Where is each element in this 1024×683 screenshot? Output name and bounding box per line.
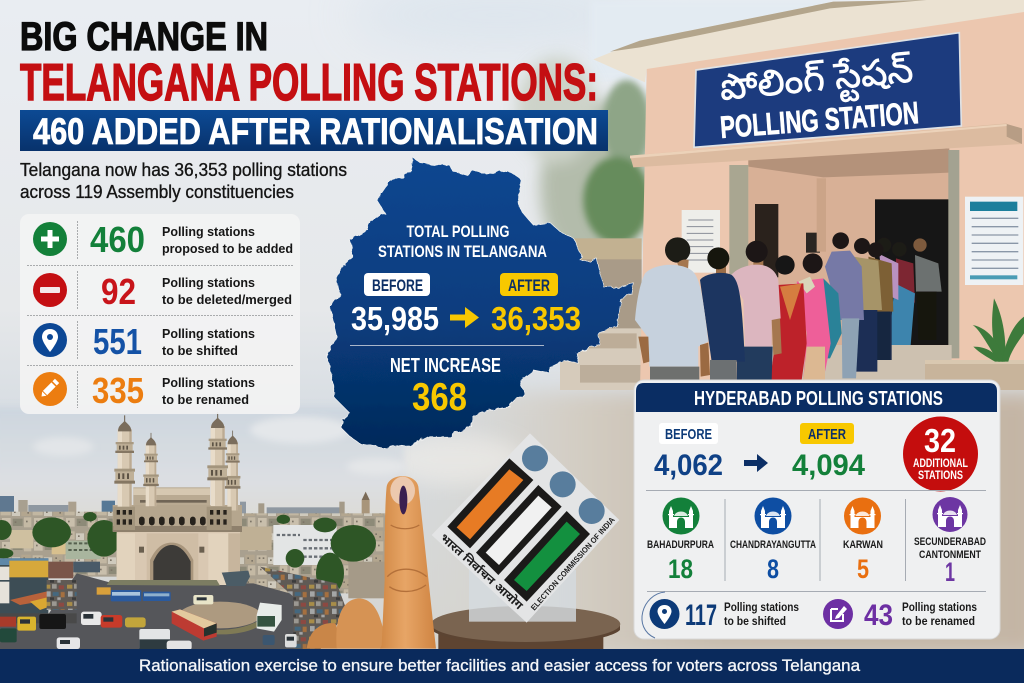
person 5: [797, 253, 831, 380]
sky behind building: [590, 0, 830, 80]
vehicles: [0, 587, 297, 650]
orange bar: [447, 458, 533, 548]
district: Secunderabad Cantonment: CANTONMENT: [919, 549, 981, 561]
row: added: Polling stations: [162, 224, 255, 239]
logo text: Hindi: भारत निर्वाचन आयोग: [437, 530, 527, 613]
title block: [20, 15, 608, 202]
stat: renamed: 43: [864, 599, 893, 632]
inked finger and hand: [307, 476, 436, 649]
title line 1: BIG CHANGE IN: [20, 15, 268, 59]
district: Karwan: KARWAN: [843, 539, 883, 551]
arrow: [744, 454, 768, 472]
person 10: [877, 238, 898, 360]
planter and plant: [925, 360, 1024, 390]
before figure: 35,985: [351, 300, 439, 337]
district: Chandrayangutta: CHANDRAYANGUTTA: [730, 539, 816, 551]
district: Secunderabad Cantonment: [914, 497, 986, 587]
crowded street on the right: [260, 567, 347, 650]
row: renamed: to be renamed: [162, 392, 249, 407]
row: added: proposed to be added: [162, 241, 293, 256]
sign: Telugu: పోలింగ్ స్టేషన్: [718, 49, 915, 114]
row: renamed: Polling stations: [162, 375, 255, 390]
row: deleted: 92: [101, 271, 136, 312]
arrow: [450, 307, 479, 328]
net increase: NET INCREASE: [390, 355, 501, 377]
sign board: [694, 33, 961, 147]
garden wall: [570, 238, 642, 260]
acrylic stand: [469, 570, 576, 622]
stat: shifted: [650, 599, 799, 632]
covered entrance: [748, 157, 949, 350]
roof: [593, 0, 1024, 82]
row: deleted: [33, 271, 292, 312]
stat: shifted: 117: [685, 599, 717, 632]
polling station sign text: [718, 49, 920, 145]
before figure: [351, 273, 439, 337]
city sky: [0, 407, 403, 517]
person 4: [770, 255, 807, 380]
Charminar: [107, 412, 242, 586]
logo text: English: ELECTION COMMISSION OF INDIA: [529, 515, 617, 612]
additional stations badge: [903, 416, 978, 492]
additional stations badge: ADDITIONAL: [913, 458, 968, 470]
stat: shifted: Polling stations: [724, 600, 799, 614]
district: Karwan: 5: [857, 554, 869, 584]
photo: polling station building with voters queueing: [517, 0, 1024, 390]
after figure: 36,353: [491, 300, 581, 337]
additional stations badge: STATIONS: [918, 470, 963, 482]
row: deleted: to be deleted/merged: [162, 292, 292, 307]
map heading: TOTAL POLLING: [406, 222, 510, 241]
trees: [517, 57, 653, 273]
sign: English: POLLING STATION: [719, 95, 920, 145]
white bar: [476, 485, 562, 575]
kiosk beside monument: [222, 571, 250, 586]
panel header: [636, 383, 997, 412]
before figure: BEFORE: [372, 276, 423, 295]
district: Chandrayangutta: [730, 498, 816, 584]
roundabout: [179, 602, 261, 628]
after: 4,094: [792, 449, 865, 482]
row: deleted: Polling stations: [162, 275, 255, 290]
person 9: [868, 242, 893, 360]
panel: Hyderabad polling stations: [634, 380, 1000, 639]
row: renamed: 335: [92, 370, 144, 411]
after: [792, 423, 865, 482]
map heading: [378, 222, 547, 261]
map heading: STATIONS IN TELANGANA: [378, 242, 547, 261]
doors: [875, 199, 949, 346]
person 12: [913, 238, 942, 340]
before: [654, 423, 723, 482]
person 3: [730, 241, 782, 380]
after figure: AFTER: [508, 276, 550, 295]
state outline: [327, 157, 633, 448]
footer banner: Rationalisation exercise to ensure better facilities and easier access for voters across Telangana: [139, 656, 861, 675]
district: Bahadurpura: [647, 498, 714, 584]
intro text: across 119 Assembly constituencies: [20, 182, 294, 202]
after figure: [491, 273, 581, 337]
city buildings: [0, 512, 387, 598]
person 7: [825, 232, 864, 378]
skyline: [0, 492, 370, 527]
pillars: [729, 165, 748, 280]
district: Bahadurpura: BAHADURPURA: [647, 539, 714, 551]
intro text: [20, 160, 347, 202]
district: Chandrayangutta: 8: [767, 554, 779, 584]
person 11: [888, 242, 915, 345]
additional stations badge: 32: [924, 422, 956, 459]
row: shifted: [33, 321, 255, 362]
person 2: [700, 247, 745, 380]
person 8: [853, 238, 882, 372]
logo buttons: [522, 445, 605, 524]
row: shifted: to be shifted: [162, 343, 238, 358]
net increase: [390, 355, 501, 419]
subtitle banner: 460 ADDED AFTER RATIONALISATION: [33, 111, 598, 152]
panel: key changes: [20, 214, 300, 414]
stat: renamed: [823, 599, 977, 632]
person 1: [635, 237, 710, 380]
green bar: [504, 511, 590, 602]
person 6: [823, 278, 842, 358]
stat: shifted: to be shifted: [724, 614, 786, 628]
district: Secunderabad Cantonment: 1: [945, 557, 955, 587]
district: Bahadurpura: 18: [668, 554, 693, 584]
logo plate: [432, 433, 619, 623]
district: Karwan: [843, 498, 883, 584]
row: added: 460: [90, 219, 145, 260]
stat: renamed: to be renamed: [902, 614, 975, 628]
stat: renamed: Polling stations: [902, 600, 977, 614]
net increase: 368: [412, 376, 467, 419]
before: 4,062: [654, 449, 723, 482]
city trees: [0, 512, 376, 594]
table: [431, 606, 620, 650]
intro text: Telangana now has 36,353 polling stations: [20, 160, 347, 180]
map: Telangana statewide totals: [327, 157, 633, 448]
district: Secunderabad Cantonment: SECUNDERABAD: [914, 536, 986, 548]
after: AFTER: [808, 426, 846, 443]
row: added: [33, 219, 293, 260]
footer banner: [0, 649, 1024, 683]
row: renamed: [33, 370, 255, 411]
shopfronts: [0, 558, 100, 623]
election commission logo on a round table: [431, 433, 620, 650]
wall: [640, 12, 1024, 390]
title line 2: TELANGANA POLLING STATIONS:: [20, 54, 598, 112]
photo: Charminar and Hyderabad street: [0, 407, 407, 650]
panel header: HYDERABAD POLLING STATIONS: [694, 388, 943, 410]
forecourt steps: [560, 328, 642, 390]
before: BEFORE: [665, 426, 712, 443]
road: [0, 573, 320, 650]
row: shifted: 551: [93, 321, 142, 362]
row: shifted: Polling stations: [162, 326, 255, 341]
notice boards: [682, 210, 720, 273]
